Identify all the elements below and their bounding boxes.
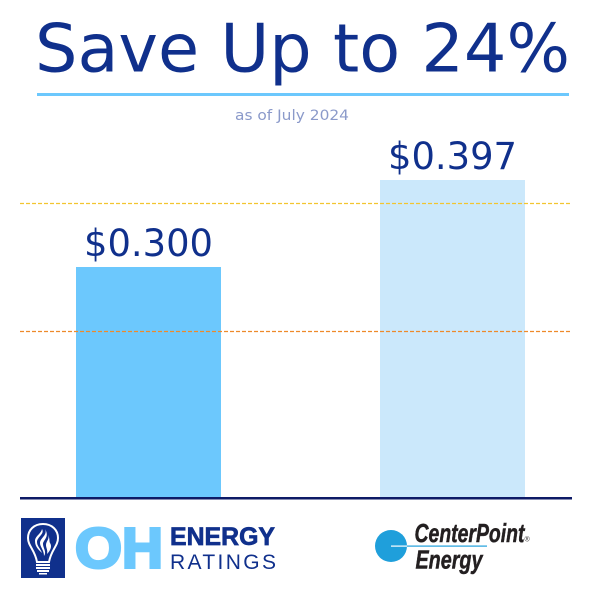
bar: CenterPoint Energy bbox=[380, 180, 525, 498]
logo text: CenterPoint: CenterPoint bbox=[414, 518, 526, 548]
reference line: upper bbox=[20, 202, 571, 204]
icon: light bulb with flame bbox=[21, 518, 65, 578]
logo text: ENERGY: ENERGY bbox=[170, 523, 275, 551]
logo: CenterPoint Energy bbox=[375, 518, 530, 574]
logo letter: H: H bbox=[122, 516, 163, 580]
logo text: RATINGS: RATINGS bbox=[170, 551, 276, 574]
bar: OH Energy Ratings bbox=[76, 267, 221, 498]
bar chart bbox=[20, 135, 572, 500]
logo text: Energy: Energy bbox=[416, 544, 484, 574]
logo text: OH bbox=[75, 516, 163, 580]
logo letter: O: O bbox=[75, 516, 122, 580]
subtitle: date: as of July 2024 bbox=[235, 108, 349, 124]
value label: CenterPoint Energy: $0.397 bbox=[388, 135, 517, 178]
icon: blue circle bbox=[375, 530, 407, 562]
logo line bbox=[391, 546, 487, 547]
reference line: lower bbox=[20, 330, 571, 332]
value label: OH Energy Ratings: $0.300 bbox=[84, 222, 213, 265]
chart baseline bbox=[20, 497, 572, 500]
title underline bbox=[37, 93, 569, 96]
logo: OH Energy Ratings bbox=[21, 516, 276, 580]
registered mark: ® bbox=[524, 536, 530, 544]
title: Save Up to 24% bbox=[35, 10, 570, 88]
